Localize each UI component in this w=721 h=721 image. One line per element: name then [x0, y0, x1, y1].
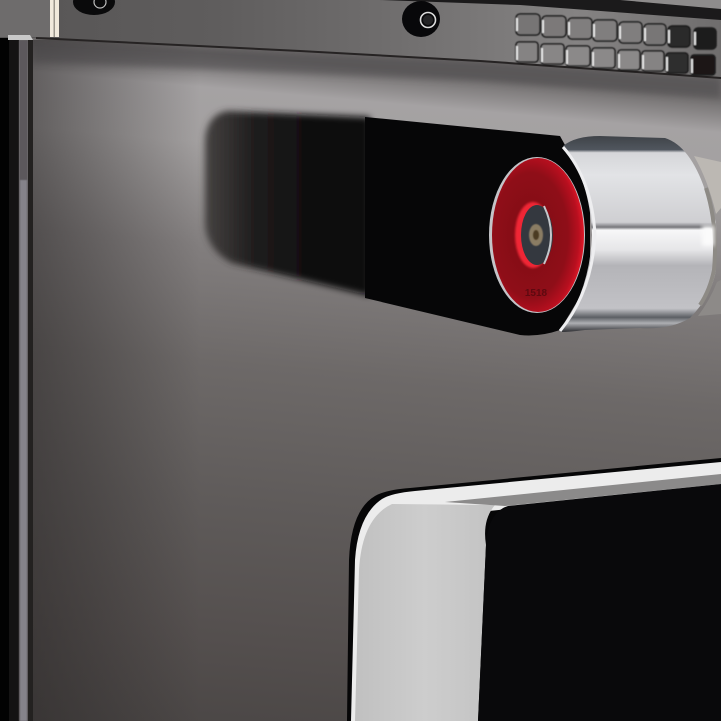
knurled collar	[694, 156, 721, 316]
knob red cap	[489, 157, 585, 313]
vent grid	[516, 14, 716, 75]
knob chrome body	[560, 136, 716, 332]
icon: top-left screw	[73, 0, 115, 15]
oven window frame	[347, 458, 721, 721]
top trim band	[0, 0, 721, 78]
icon: centre screw	[402, 1, 440, 37]
left side edge	[0, 35, 33, 721]
knob stem black	[365, 117, 590, 335]
oven window glass	[478, 484, 721, 721]
knob shadow	[205, 111, 370, 296]
cap number: 1518	[525, 288, 548, 299]
